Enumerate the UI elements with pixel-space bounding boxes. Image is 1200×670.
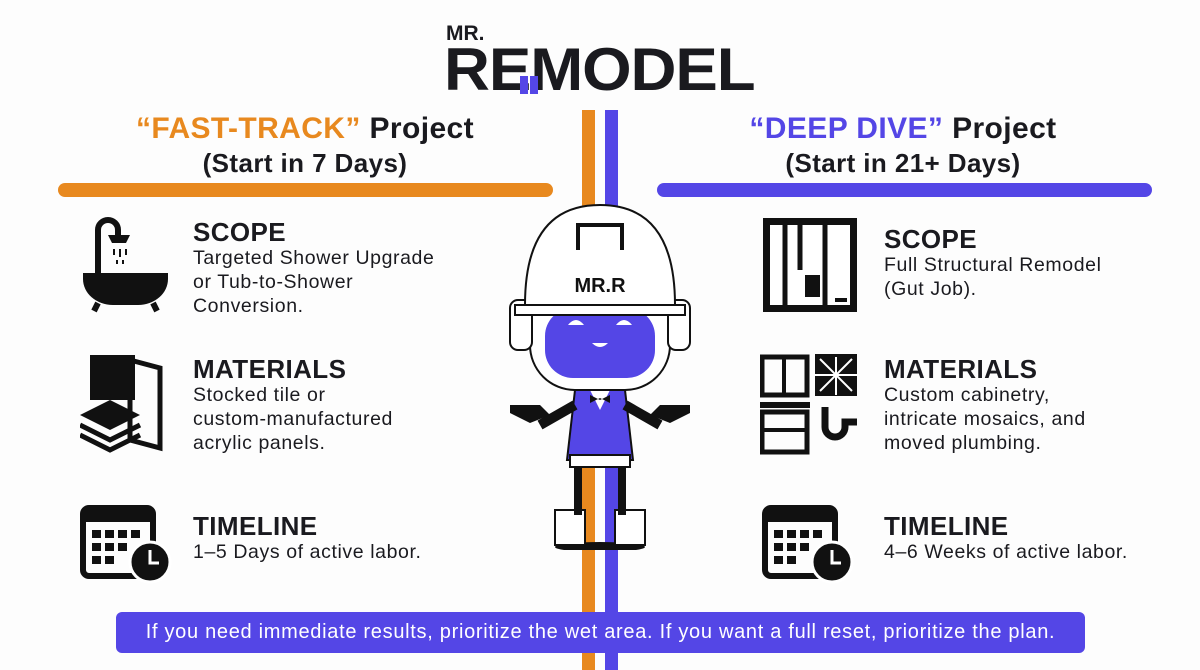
scope left <box>193 217 434 317</box>
logo: REMODEL <box>444 36 755 103</box>
robot mascot <box>509 204 691 550</box>
scope right: Full Structural Remodel <box>884 254 1102 276</box>
left title <box>136 112 474 178</box>
materials right <box>884 354 1086 454</box>
timeline left: TIMELINE <box>193 511 318 541</box>
scope right <box>884 224 1102 300</box>
materials right: intricate mosaics, and <box>884 408 1086 430</box>
left title: “FAST-TRACK” Project <box>136 112 474 145</box>
vertical bars <box>582 110 595 670</box>
icon: cabinets mosaic plumbing <box>760 354 857 454</box>
timeline left: 1–5 Days of active labor. <box>193 541 422 563</box>
materials left: MATERIALS <box>193 354 346 384</box>
icon: calendar left <box>80 505 168 580</box>
materials left: Stocked tile or <box>193 384 326 406</box>
robot mascot: MR.R <box>574 275 626 297</box>
materials right: moved plumbing. <box>884 432 1042 454</box>
materials left: custom-manufactured <box>193 408 393 430</box>
right title: (Start in 21+ Days) <box>785 148 1021 178</box>
icon: bathtub <box>83 217 168 312</box>
scope left: Conversion. <box>193 295 304 317</box>
icon: tiles <box>80 355 162 453</box>
materials right: Custom cabinetry, <box>884 384 1050 406</box>
materials left: acrylic panels. <box>193 432 326 454</box>
right title: “DEEP DIVE” Project <box>749 112 1057 145</box>
icon: calendar right <box>762 505 850 580</box>
logo: MR. <box>446 22 484 45</box>
materials left <box>193 354 393 454</box>
timeline left <box>193 511 422 563</box>
icon: gutted bathroom <box>763 218 857 312</box>
scope right: SCOPE <box>884 224 977 254</box>
timeline right: TIMELINE <box>884 511 1009 541</box>
scope right: (Gut Job). <box>884 278 977 300</box>
bottom banner: If you need immediate results, prioritize the wet area. If you want a full reset, prioritize the plan. <box>146 621 1055 643</box>
timeline right <box>884 511 1128 563</box>
scope left: or Tub-to-Shower <box>193 271 353 293</box>
timeline right: 4–6 Weeks of active labor. <box>884 541 1128 563</box>
horizontal bars <box>58 183 553 197</box>
scope left: SCOPE <box>193 217 286 247</box>
left title: (Start in 7 Days) <box>203 148 407 178</box>
scope left: Targeted Shower Upgrade <box>193 247 434 269</box>
bottom banner <box>116 612 1085 653</box>
materials right: MATERIALS <box>884 354 1037 384</box>
right title <box>749 112 1057 178</box>
